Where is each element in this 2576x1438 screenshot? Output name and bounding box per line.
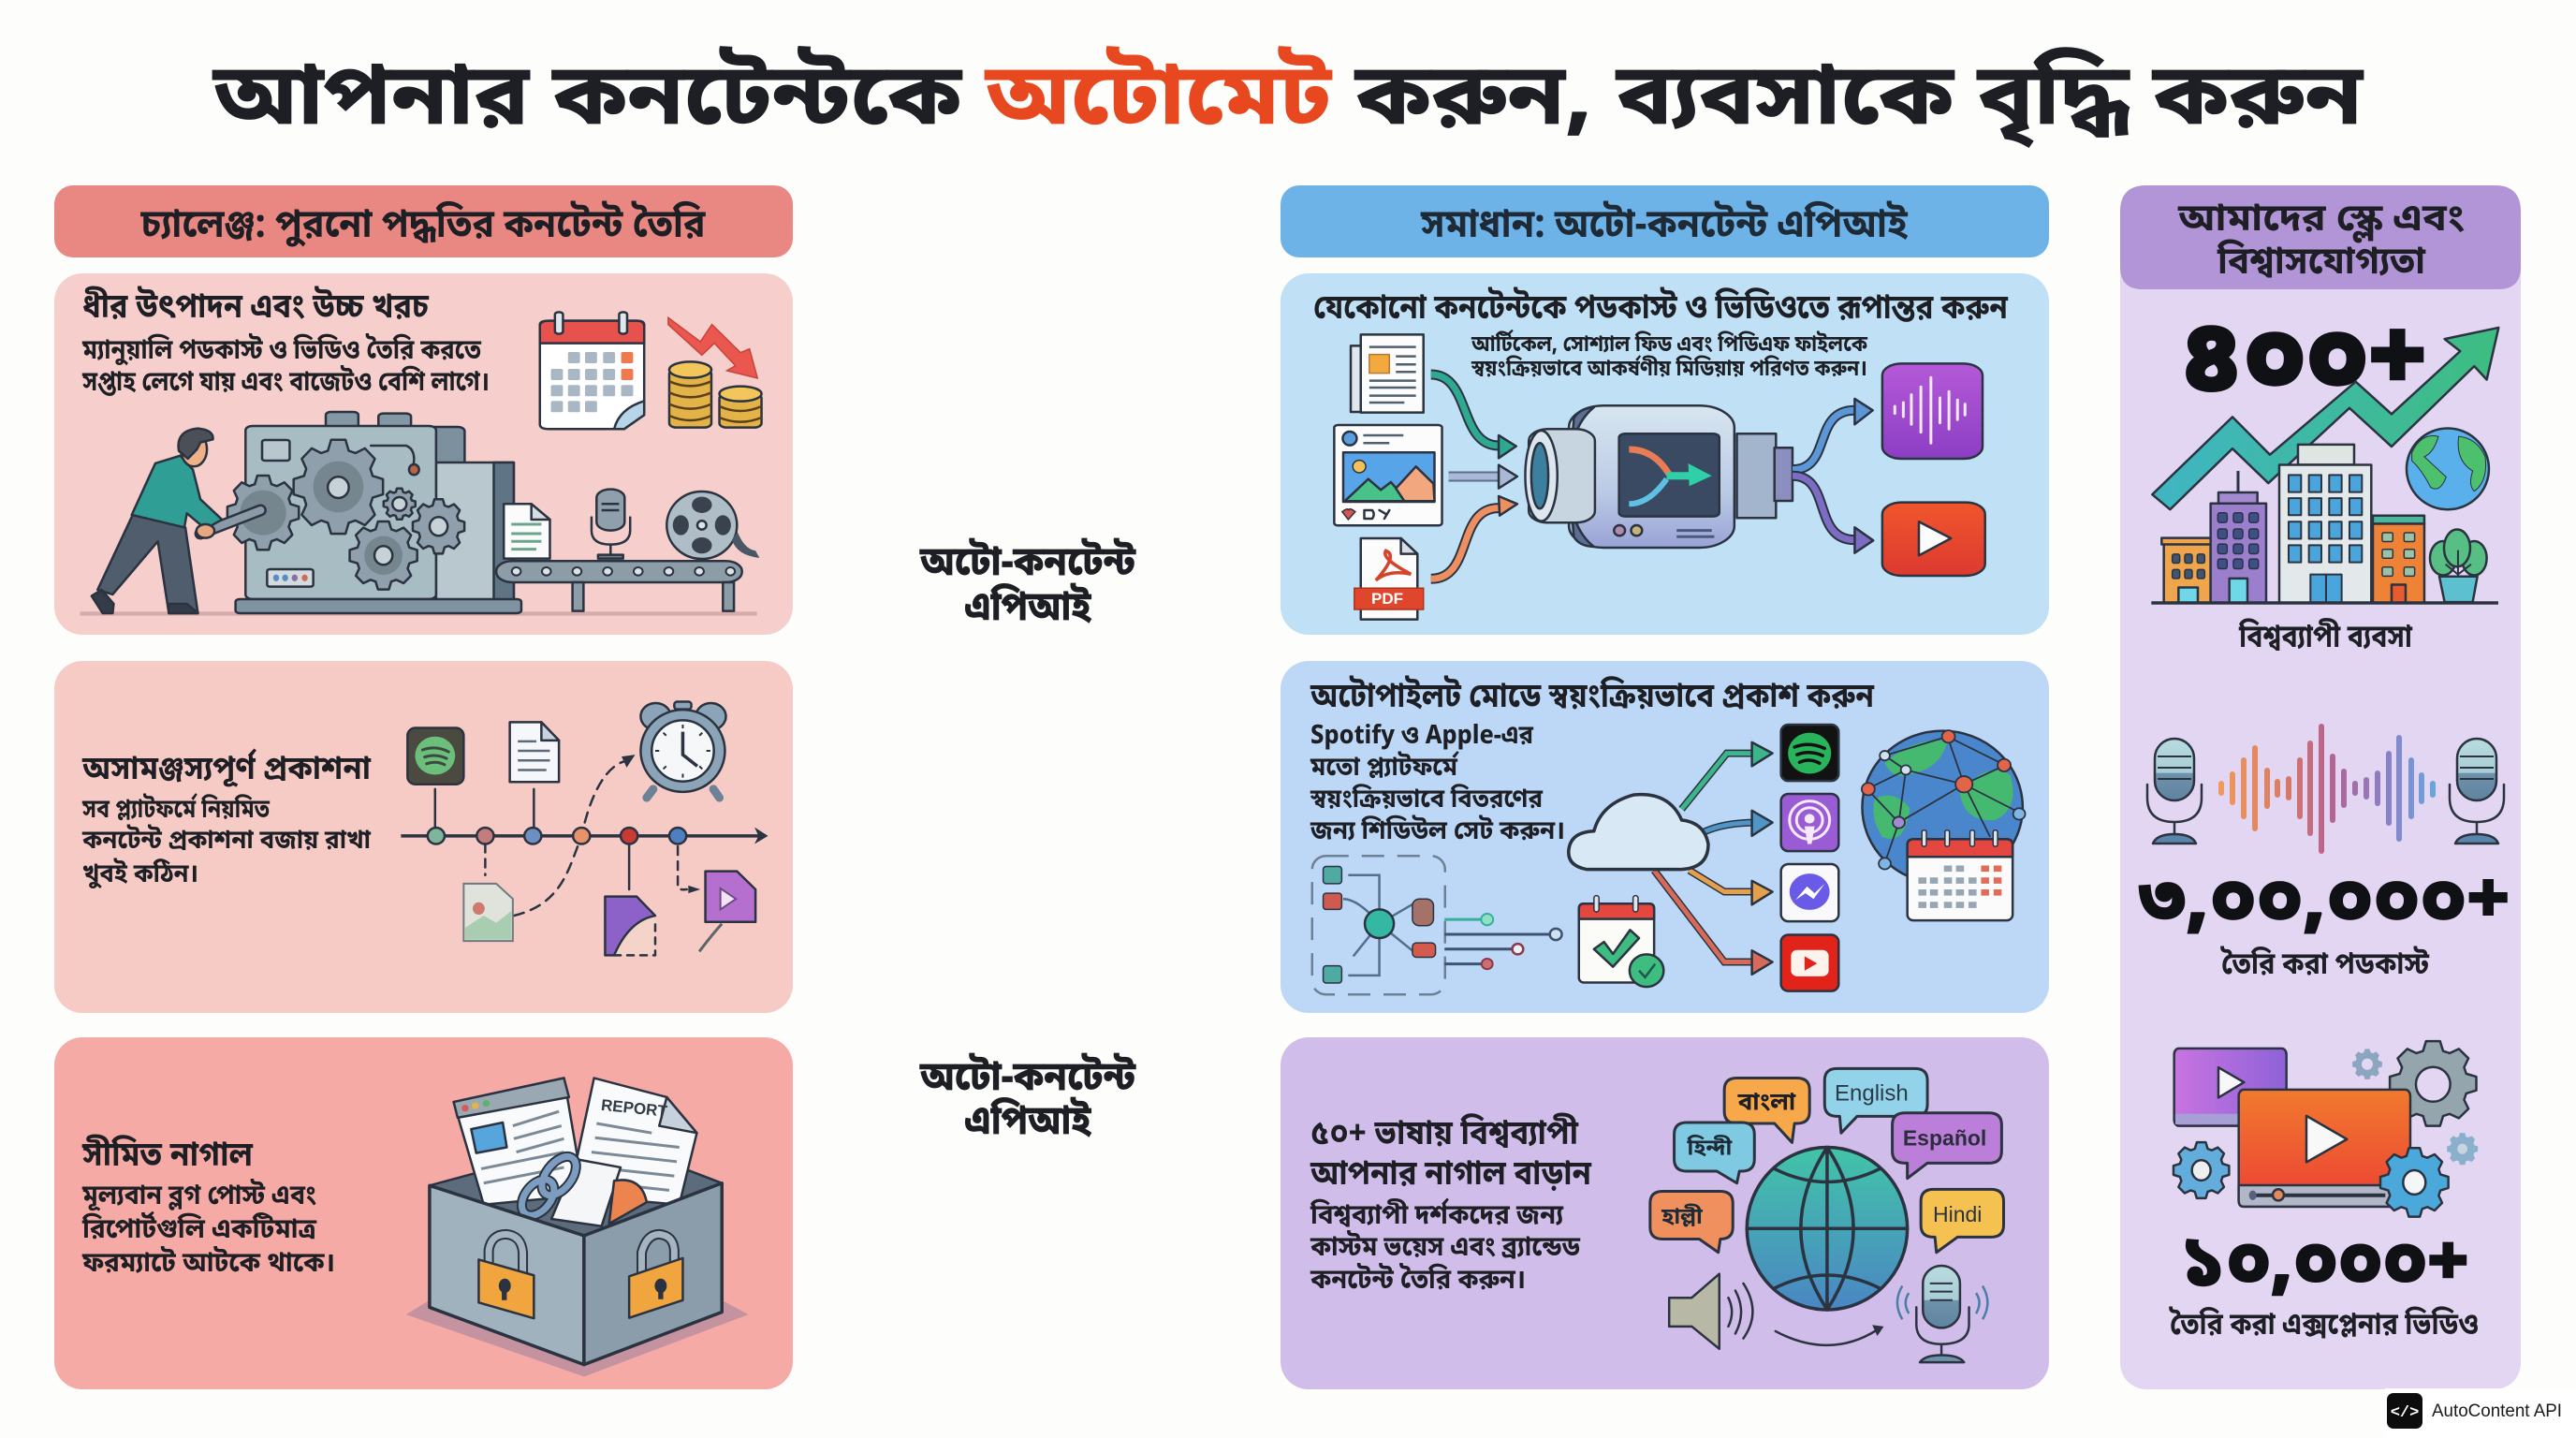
icon: falling arrow and coins bbox=[668, 317, 762, 428]
panel: slow production and high cost bbox=[54, 273, 793, 635]
conveyor bbox=[496, 561, 742, 582]
icon: pdf: PDF bbox=[1371, 590, 1403, 608]
icon: globe bbox=[1747, 1148, 1908, 1310]
illustration: locked box with documents: REPORT bbox=[600, 1096, 668, 1121]
body text: inconsistent publishing bbox=[81, 792, 372, 893]
brand badge: </> bbox=[2391, 1404, 2419, 1422]
report page bbox=[569, 1078, 696, 1205]
icon: spotify bbox=[1781, 725, 1838, 781]
heading: global reach: ৫০+ ভাষায় বিশ্বব্যাপী bbox=[1310, 1113, 1579, 1158]
panel: convert content bbox=[1281, 273, 2049, 635]
icon: video tile bbox=[1882, 503, 1985, 576]
stat: podcasts: ৩,০০,০০০+ bbox=[2139, 856, 2510, 953]
heading: global reach: আপনার নাগাল বাড়ান bbox=[1310, 1153, 1592, 1198]
buildings bbox=[2164, 540, 2211, 603]
body text: limited reach: ফরম্যাটে আটকে থাকে। bbox=[81, 1246, 335, 1283]
icon: video file bbox=[699, 872, 755, 951]
body text: limited reach bbox=[81, 1179, 335, 1283]
icon: youtube bbox=[1781, 934, 1838, 991]
film reel bbox=[666, 492, 737, 559]
person bbox=[97, 515, 198, 613]
panel header: solution: সমাধান: অটো-কনটেন্ট এপিআই bbox=[1420, 200, 1909, 254]
body text: autopilot: Spotify ও Apple-এর bbox=[1310, 720, 1534, 755]
illustration: videos and gears bbox=[2174, 1041, 2478, 1217]
panel header: challenge bbox=[54, 185, 793, 257]
label: videos: তৈরি করা এক্সপ্লেনার ভিডিও bbox=[2169, 1307, 2479, 1347]
panel header: scale and trust: আমাদের স্কেল এবং bbox=[2177, 197, 2465, 246]
bubble: Hindi Bengali script bbox=[1675, 1123, 1754, 1183]
microphone bbox=[596, 490, 624, 531]
icon: cloud bbox=[1569, 795, 1708, 870]
body text: limited reach: মূল্যবান ব্লগ পোস্ট এবং bbox=[81, 1179, 316, 1215]
icon: calendar bbox=[540, 312, 644, 429]
center label: upper: অটো-কনটেন্ট bbox=[919, 538, 1136, 592]
arrow: social post to converter bbox=[1448, 465, 1517, 489]
connectors bbox=[435, 789, 629, 889]
heading: global reach bbox=[1310, 1113, 1592, 1198]
heading: limited reach: সীমিত নাগাল bbox=[81, 1135, 254, 1180]
heading: convert content: যেকোনো কনটেন্টকে পডকাস্ট ও ভিডিওতে রূপান্তর করুন bbox=[1313, 287, 2009, 332]
box faces bbox=[430, 1185, 584, 1365]
small paper and pie bbox=[551, 1159, 621, 1226]
icon: messenger bbox=[1781, 864, 1838, 921]
bubble: Bengali: বাংলা bbox=[1737, 1088, 1796, 1121]
plant bbox=[2430, 529, 2487, 575]
bubble: English bbox=[1824, 1068, 1927, 1133]
label: businesses: বিশ্বব্যাপী ব্যবসা bbox=[2238, 617, 2412, 660]
bubble: Hindi: Hindi bbox=[1933, 1202, 1982, 1226]
body text: autopilot: জন্য শিডিউল সেট করুন। bbox=[1310, 814, 1565, 850]
heading: slow production: ধীর উৎপাদন এবং উচ্চ খরচ bbox=[82, 286, 430, 331]
center label: lower bbox=[919, 1053, 1136, 1151]
brand badge bbox=[2385, 1388, 2576, 1438]
icon: apple podcasts bbox=[1781, 794, 1838, 851]
body text: slow production: সপ্তাহ লেগে যায় এবং বাজেটও বেশি লাগে। bbox=[81, 365, 490, 402]
chart: audio waveform bbox=[2218, 724, 2436, 854]
illustration: worker turning machine gears bbox=[80, 412, 759, 616]
icon: social post bbox=[1334, 425, 1442, 525]
timeline axis bbox=[401, 834, 762, 838]
arrow: voice bbox=[1776, 1325, 1883, 1345]
browser page bbox=[454, 1078, 584, 1205]
body text: convert content bbox=[1471, 330, 1867, 385]
illustration: locked box with documents bbox=[406, 1078, 749, 1376]
icon: left microphone bbox=[2147, 739, 2202, 844]
body text: autopilot: স্বয়ংক্রিয়ভাবে বিতরণের bbox=[1310, 783, 1544, 818]
body text: convert content: স্বয়ংক্রিয়ভাবে আকর্ষণীয় মিডিয়ায় পরিণত করুন। bbox=[1471, 355, 1867, 385]
title: করুন, ব্যবসাকে বৃদ্ধি করুন bbox=[1354, 46, 2364, 158]
bubble: Spanish bbox=[1893, 1113, 2001, 1179]
panel: inconsistent publishing bbox=[54, 661, 793, 1013]
body text: inconsistent publishing: খুবই কঠিন। bbox=[82, 858, 198, 893]
stat: videos: ১০,০০০+ bbox=[2181, 1221, 2469, 1315]
doc bbox=[504, 504, 549, 559]
body text: slow production bbox=[81, 333, 490, 402]
bubble: orange language bbox=[1650, 1191, 1733, 1253]
center label: lower: অটো-কনটেন্ট bbox=[919, 1053, 1136, 1107]
body text: autopilot bbox=[1310, 720, 1565, 850]
heading: inconsistent publishing: অসামঞ্জস্যপূর্ণ প্রকাশনা bbox=[81, 749, 372, 793]
arrow: pdf to converter bbox=[1431, 496, 1517, 579]
gears bbox=[294, 440, 383, 534]
title: আপনার কনটেন্টকে bbox=[212, 46, 963, 158]
bubble: English: English bbox=[1835, 1081, 1909, 1107]
icon: speaker bbox=[1669, 1274, 1752, 1349]
arrow: article to converter bbox=[1431, 374, 1516, 458]
icon: broken purple file bbox=[605, 897, 655, 955]
icon: audio tile bbox=[1882, 363, 1983, 459]
bubble: Hindi bbox=[1921, 1189, 2004, 1253]
stat: businesses: ৪০০+ bbox=[2180, 299, 2427, 433]
center label: upper: এপিআই bbox=[964, 583, 1092, 637]
body text: slow production: ম্যানুয়ালি পডকাস্ট ও ভিডিও তৈরি করতে bbox=[81, 333, 482, 370]
arrow: converter to audio bbox=[1793, 399, 1873, 470]
padlock left bbox=[489, 1234, 523, 1274]
body text: global reach: কনটেন্ট তৈরি করুন। bbox=[1310, 1263, 1526, 1299]
illustration: growth chart and buildings bbox=[2151, 328, 2498, 603]
panel: limited reach bbox=[54, 1037, 793, 1389]
panel header: scale and trust: বিশ্বাসযোগ্যতা bbox=[2217, 240, 2426, 289]
padlock right bbox=[642, 1234, 674, 1276]
earth bbox=[2407, 429, 2489, 509]
icon: image file bbox=[463, 884, 513, 941]
body text: autopilot: মতো প্ল্যাটফর্মে bbox=[1310, 750, 1459, 786]
icon: pdf bbox=[1354, 538, 1424, 620]
body text: global reach: কাস্টম ভয়েস এবং ব্র্যান্ডেড bbox=[1310, 1230, 1581, 1267]
arrow: converter to video bbox=[1793, 476, 1873, 553]
panel header: scale and trust bbox=[2120, 185, 2521, 289]
icon: microphone bbox=[1897, 1266, 1987, 1362]
brand badge: AutoContent API bbox=[2432, 1401, 2562, 1421]
icon: converter machine bbox=[1525, 405, 1793, 548]
title: অটোমেট bbox=[985, 46, 1333, 158]
link bbox=[515, 1151, 583, 1221]
bubble: Bengali bbox=[1724, 1078, 1809, 1142]
icon: spotify tile bbox=[407, 728, 463, 785]
panel: global reach bbox=[1281, 1037, 2049, 1389]
panel header: challenge: চ্যালেঞ্জ: পুরনো পদ্ধতির কনটেন্ট তৈরি bbox=[140, 200, 706, 254]
icon: workflow diagram bbox=[1312, 856, 1562, 994]
body text: convert content: আর্টিকেল, সোশ্যাল ফিড এবং পিডিএফ ফাইলকে bbox=[1471, 330, 1867, 360]
body text: inconsistent publishing: কনটেন্ট প্রকাশনা বজায় রাখা bbox=[81, 824, 372, 859]
bubble: Hindi Bengali script: হিন্দী bbox=[1686, 1135, 1734, 1165]
icon: calendar check bbox=[1579, 896, 1663, 987]
icon: alarm clock bbox=[640, 701, 726, 798]
center label: lower: এপিআই bbox=[964, 1097, 1092, 1151]
title bbox=[212, 46, 2364, 158]
body text: global reach: বিশ্বব্যাপী দর্শকদের জন্য bbox=[1310, 1198, 1564, 1235]
icon: network globe with calendar bbox=[1862, 730, 2026, 920]
heading: autopilot: অটোপাইলট মোডে স্বয়ংক্রিয়ভাবে প্রকাশ করুন bbox=[1310, 676, 1875, 721]
icon: document bbox=[510, 722, 559, 782]
distribution arrows bbox=[1654, 742, 1773, 975]
panel header: solution bbox=[1281, 185, 2049, 257]
center label: upper bbox=[919, 538, 1136, 637]
label: podcasts: তৈরি করা পডকাস্ট bbox=[2220, 946, 2430, 987]
body text: inconsistent publishing: সব প্ল্যাটফর্মে নিয়মিত bbox=[81, 792, 270, 829]
icon: article bbox=[1351, 334, 1424, 413]
timeline with scattered content bbox=[401, 701, 768, 955]
bubble: Spanish: Español bbox=[1903, 1125, 1986, 1150]
body text: limited reach: রিপোর্টগুলি একটিমাত্র bbox=[81, 1211, 317, 1249]
panel: scale and trust bbox=[2120, 185, 2521, 1389]
panel: autopilot publishing bbox=[1281, 661, 2049, 1013]
icon: right microphone bbox=[2450, 739, 2504, 844]
bubble: orange language: হাল্লী bbox=[1661, 1203, 1704, 1233]
body text: global reach bbox=[1310, 1198, 1581, 1299]
